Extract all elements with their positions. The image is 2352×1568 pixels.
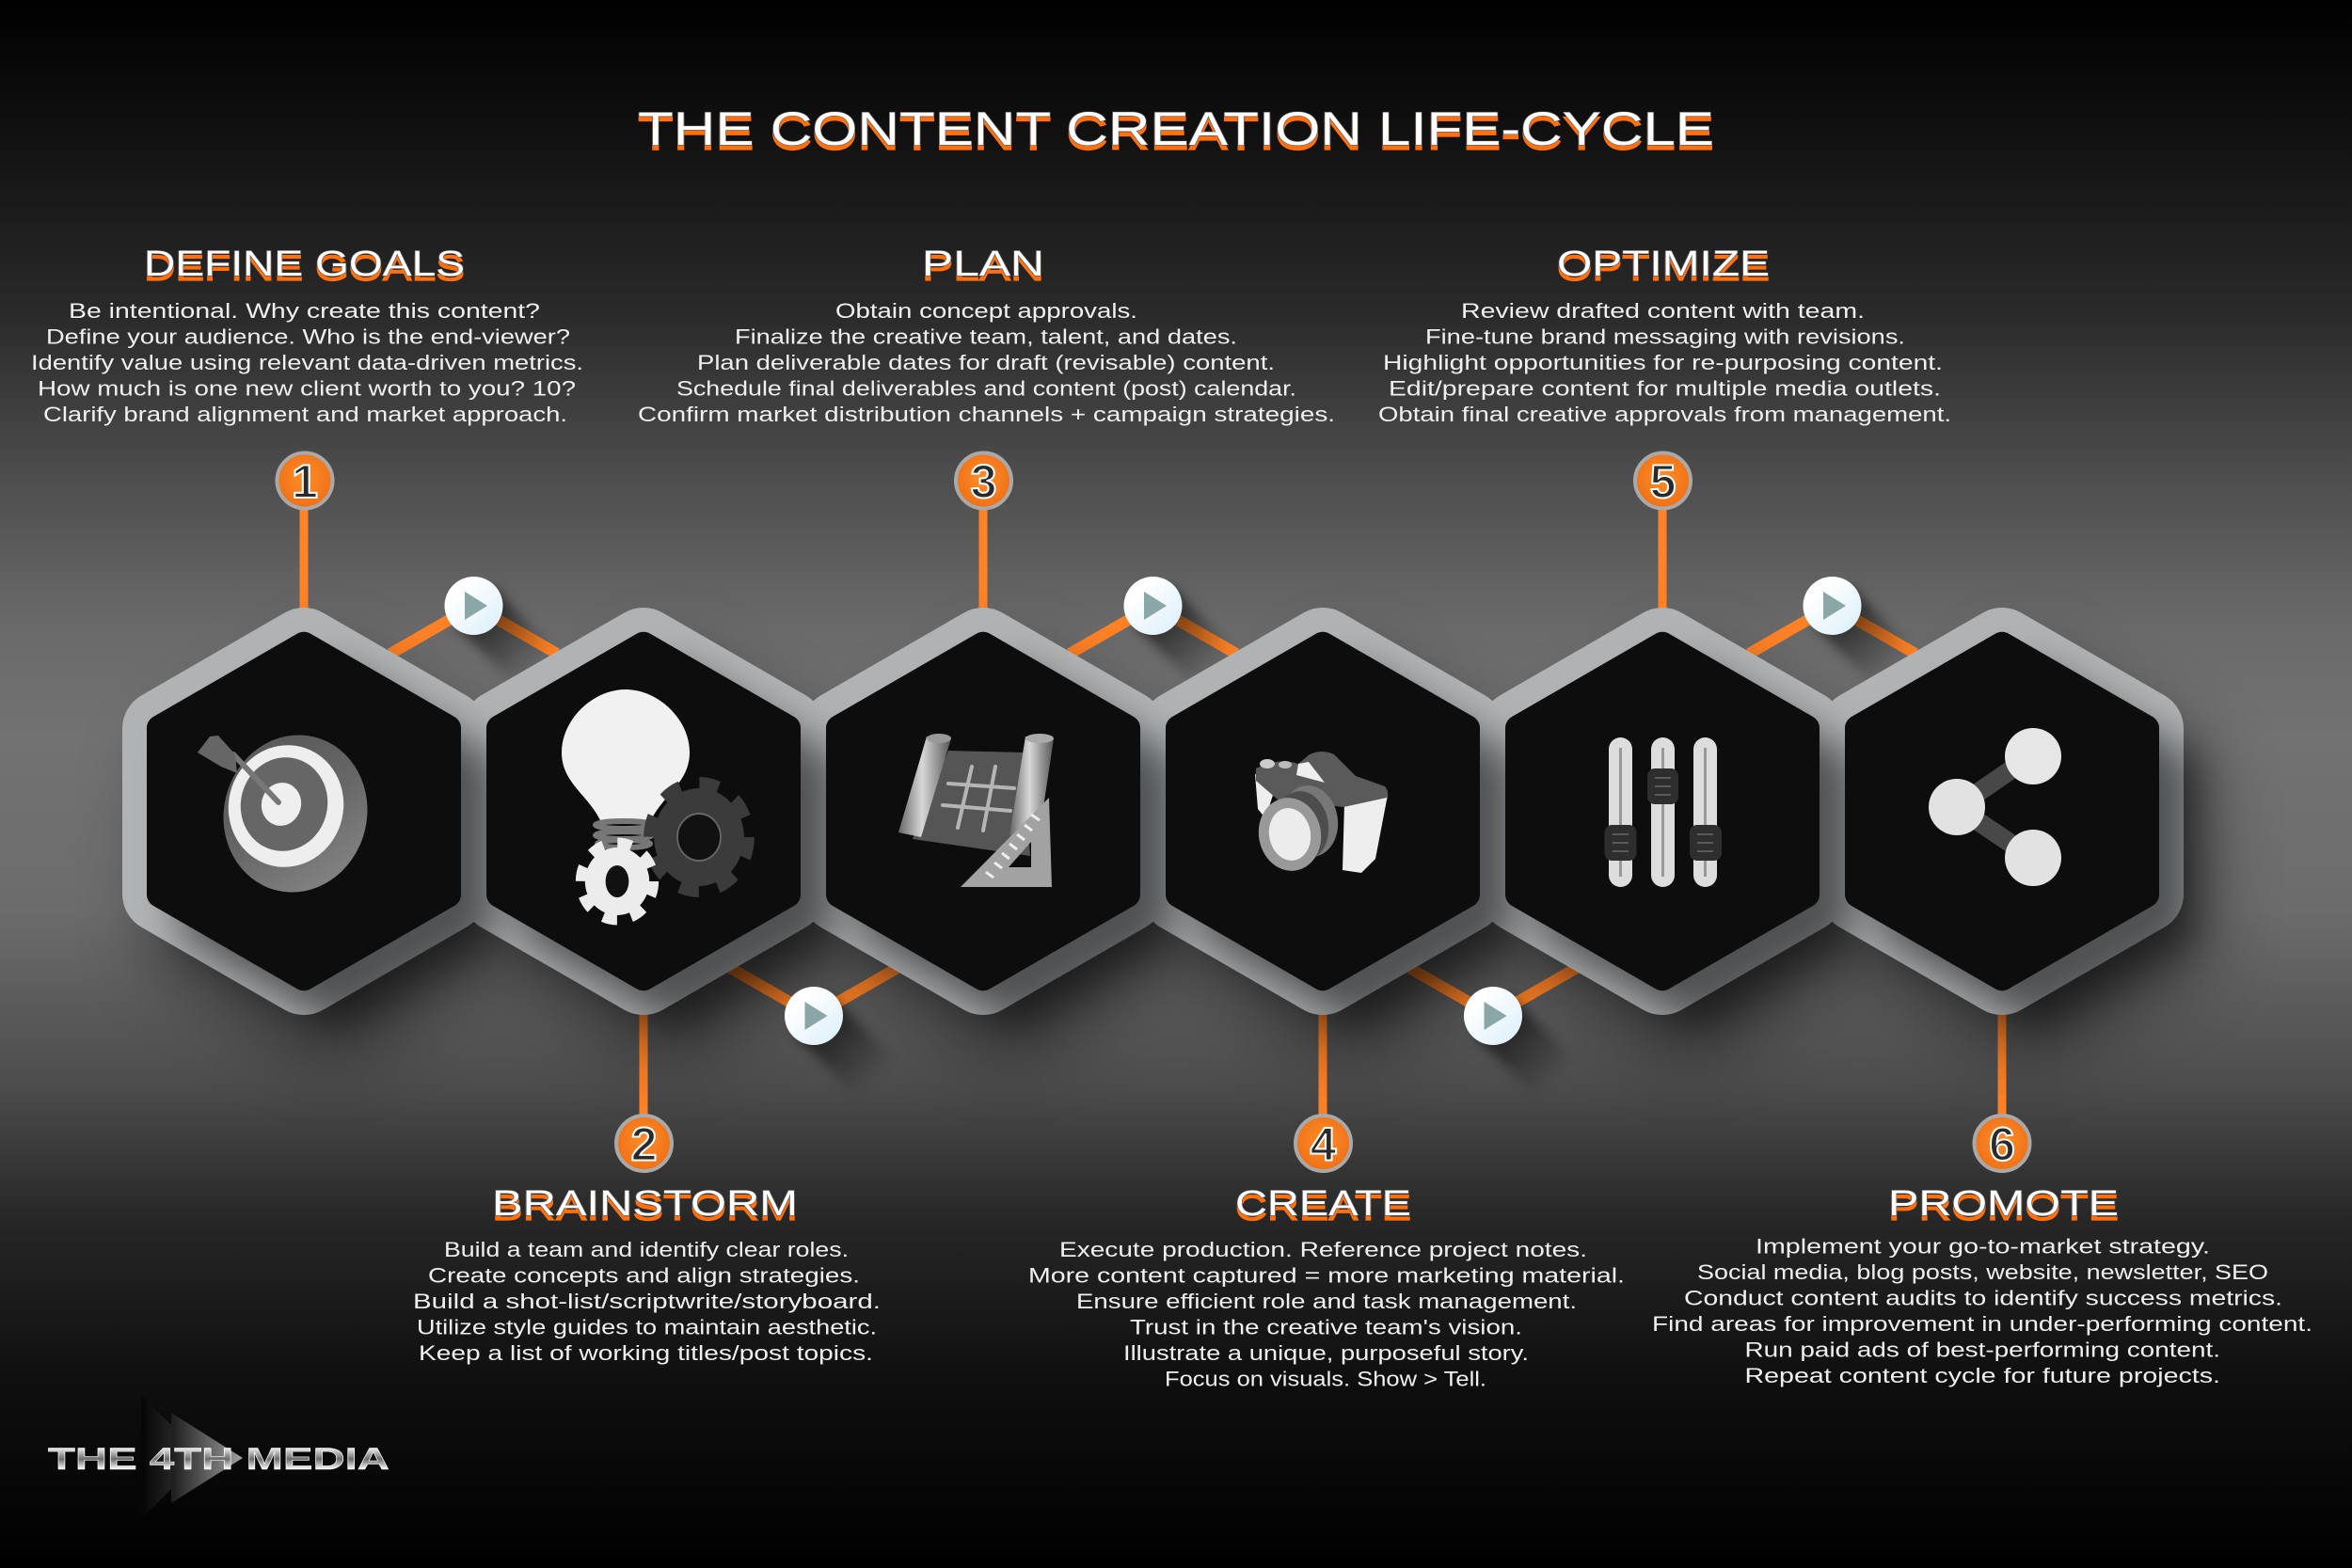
number badge 1	[277, 453, 333, 508]
text block: promote: Repeat content cycle for future projects.	[1744, 1364, 2220, 1387]
panel: create	[1028, 1184, 1625, 1390]
number badge 4: 4	[1311, 1117, 1337, 1170]
number badge 6: 6	[1989, 1117, 2015, 1170]
text block: optimize	[1378, 299, 1951, 426]
text block: promote: Social media, blog posts, website, newsletter, SEO	[1697, 1260, 2268, 1284]
text block: plan: Obtain concept approvals.	[835, 299, 1137, 323]
text block: plan: Schedule final deliverables and content (post) calendar.	[676, 376, 1296, 401]
heading: define goals: DEFINE GOALS	[144, 245, 465, 284]
number badge 6	[1974, 1116, 2030, 1171]
orange connector lines	[304, 481, 2002, 1143]
black hexagon panels	[160, 645, 2146, 977]
text block: create: Illustrate a unique, purposeful story.	[1123, 1341, 1529, 1365]
heading: brainstorm: BRAINSTORM	[492, 1184, 798, 1224]
text block: plan: Confirm market distribution channels + campaign strategies.	[638, 403, 1335, 426]
icon: light bulb and gears	[562, 689, 748, 920]
icon: sliders	[1605, 737, 1722, 887]
arrow buttons	[444, 577, 1861, 1045]
text block: brainstorm	[413, 1238, 881, 1365]
text block: define goals: Define your audience. Who is the end-viewer?	[46, 325, 570, 348]
title: THE CONTENT CREATION LIFE-CYCLE	[638, 103, 1714, 155]
number badge 5: 5	[1650, 455, 1676, 508]
panel: define goals	[31, 245, 583, 426]
text block: plan	[638, 299, 1335, 426]
number badge 4	[1295, 1116, 1351, 1171]
panel: plan	[638, 245, 1335, 426]
text block: create: Ensure efficient role and task management.	[1076, 1290, 1577, 1313]
heading: plan: PLAN	[922, 245, 1044, 284]
text block: define goals: Identify value using relevant data-driven metrics.	[31, 351, 583, 374]
number badge 5	[1635, 453, 1691, 508]
heading: optimize: OPTIMIZE	[1557, 245, 1770, 284]
text block: plan: Plan deliverable dates for draft (revisable) content.	[697, 351, 1275, 374]
heading: promote: PROMOTE	[1888, 1184, 2119, 1224]
arrow button shadows	[455, 587, 1914, 1098]
grey hexagon frames	[161, 646, 2145, 976]
text block: promote: Run paid ads of best-performing content.	[1744, 1338, 2220, 1362]
icon: camera	[1253, 752, 1388, 876]
text block: plan: Finalize the creative team, talent, and dates.	[735, 325, 1237, 348]
text block: create	[1028, 1238, 1625, 1390]
text block: promote: Find areas for improvement in under-performing content.	[1652, 1312, 2312, 1336]
text block: optimize: Edit/prepare content for multiple media outlets.	[1389, 376, 1941, 401]
text block: promote	[1652, 1234, 2312, 1387]
text block: define goals	[31, 299, 583, 426]
icon: share nodes	[1929, 728, 2061, 886]
heading: create: CREATE	[1235, 1184, 1411, 1224]
text block: brainstorm: Build a team and identify clear roles.	[444, 1238, 849, 1261]
text block: optimize: Fine-tune brand messaging with revisions.	[1425, 325, 1905, 348]
text block: create: Execute production. Reference project notes.	[1059, 1238, 1587, 1261]
number badge 3	[956, 453, 1011, 508]
text block: define goals: Be intentional. Why create this content?	[69, 299, 540, 323]
panel: promote	[1652, 1184, 2312, 1387]
text block: define goals: How much is one new client worth to you? 10?	[38, 376, 576, 401]
logo: the 4th media: THE 4TH MEDIA	[48, 1442, 389, 1476]
panel: brainstorm	[413, 1184, 881, 1365]
number badge 1: 1	[292, 455, 318, 508]
panel: optimize	[1378, 245, 1951, 426]
icon: target with arrow	[198, 720, 384, 908]
icon: blueprint and set square	[898, 734, 1054, 887]
text block: brainstorm: Build a shot-list/scriptwrite/storyboard.	[413, 1290, 881, 1313]
number badge 2: 2	[631, 1117, 657, 1170]
text block: optimize: Review drafted content with team.	[1461, 299, 1865, 323]
text block: brainstorm: Utilize style guides to maintain aesthetic.	[417, 1315, 877, 1339]
text block: promote: Conduct content audits to identify success metrics.	[1684, 1287, 2282, 1309]
text block: brainstorm: Create concepts and align strategies.	[428, 1264, 860, 1287]
text block: create: Focus on visuals. Show > Tell.	[1165, 1368, 1486, 1390]
number badge 3: 3	[971, 455, 996, 508]
text block: define goals: Clarify brand alignment and market approach.	[43, 403, 567, 426]
text block: optimize: Obtain final creative approvals from management.	[1378, 403, 1951, 426]
text block: create: Trust in the creative team's vision.	[1130, 1315, 1522, 1339]
logo: the 4th media	[48, 1396, 389, 1519]
text block: create: More content captured = more marketing material.	[1028, 1264, 1625, 1287]
number badge 2	[616, 1116, 672, 1171]
text block: brainstorm: Keep a list of working titles/post topics.	[419, 1341, 873, 1365]
text block: optimize: Highlight opportunities for re-purposing content.	[1383, 351, 1943, 374]
text block: promote: Implement your go-to-market strategy.	[1756, 1234, 2210, 1259]
